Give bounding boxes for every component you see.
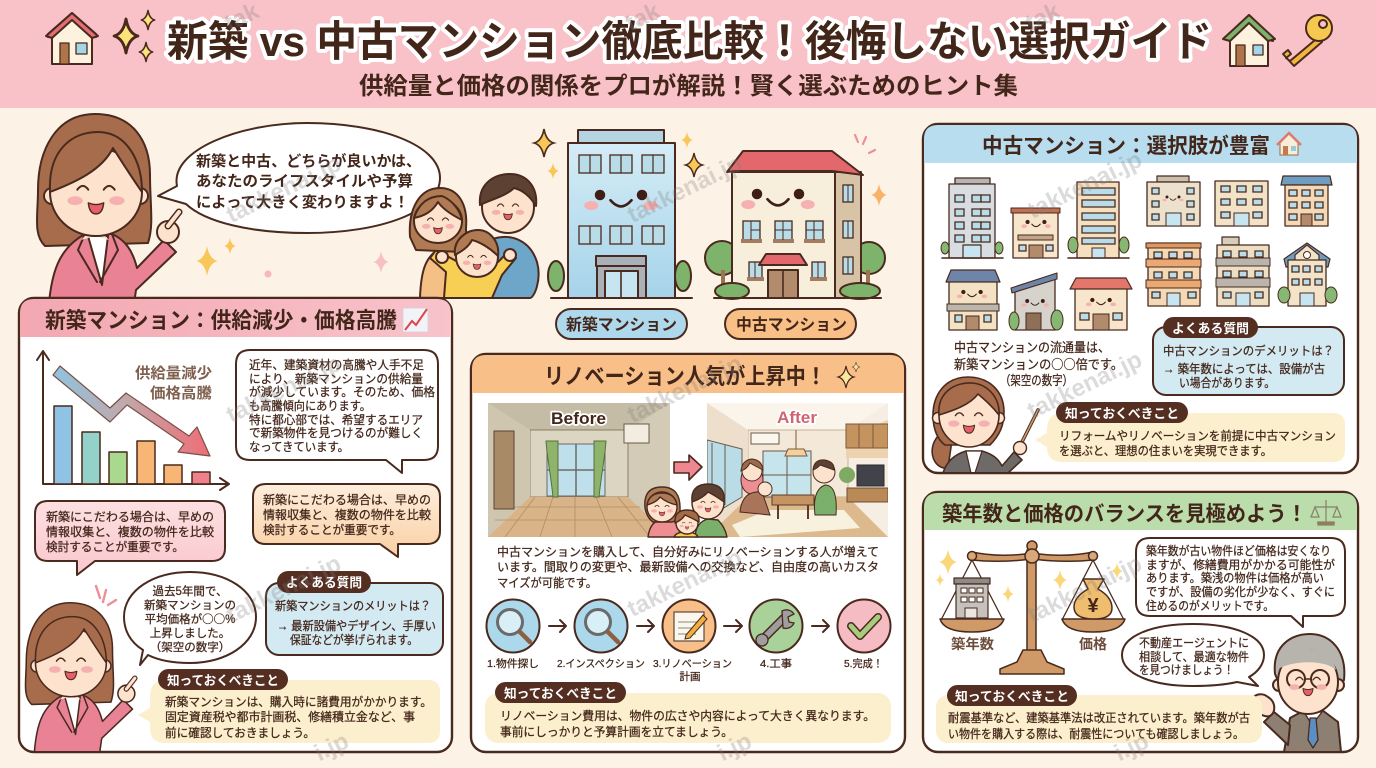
note: things to know, used condos: を選ぶと、理想の住まいを実現できます。 xyxy=(1059,443,1272,458)
speech bubble: price rise: 上昇しました。 xyxy=(150,627,230,640)
note: things to know, new condos xyxy=(138,669,440,743)
illustration: room before: Before xyxy=(551,409,606,428)
illustration: grey striped block xyxy=(1216,237,1270,306)
arrow xyxy=(812,620,829,632)
step labels: 5.完成！ xyxy=(844,658,883,670)
icon: step 1 search xyxy=(486,600,540,652)
note: things to know, new condos: 固定資産税や都市計画税、修繕積立金など、事 xyxy=(165,709,415,724)
bubble: age trade-off: ですが、設備の劣化が少なく、すぐに xyxy=(1146,584,1335,599)
FAQ box: demerits: → 築年数によっては、設備が古 xyxy=(1163,361,1325,376)
FAQ box: merits xyxy=(266,571,443,655)
illustration: room before xyxy=(488,403,670,537)
speech bubble: price rise: 過去5年間で、 xyxy=(153,584,227,598)
illustration: small face building xyxy=(1011,208,1060,258)
text: renovation description: 中古マンションを購入して、自分好みにリノベーションする人が増えて xyxy=(497,544,879,559)
icon: step 3 plan xyxy=(662,600,716,652)
illustration: beige block xyxy=(1215,181,1268,226)
watermarks: takkenai.jp xyxy=(623,544,746,623)
bubble: age trade-off: 築年数が古い物件ほど価格は安くなり xyxy=(1146,543,1331,558)
FAQ box: demerits: よくある質問 xyxy=(1172,321,1249,336)
speech bubble: intro: あなたのライフスタイルや予算 xyxy=(196,172,413,190)
bar chart: supply decline: 供給量減少 xyxy=(135,365,212,382)
bubble: age trade-off: 住めるのがメリットです。 xyxy=(1146,598,1274,613)
text: stock comparison: 新築マンションの○○倍です。 xyxy=(954,354,1123,373)
bubble: age trade-off: ますが、修繕費用がかかる可能性が xyxy=(1146,557,1335,572)
FAQ box: demerits: 中古マンションのデメリットは？ xyxy=(1163,343,1334,358)
note: things to know, balance: い物件を購入する際は、耐震性についても確認しましょう。 xyxy=(948,726,1244,741)
note: things to know, renovation: リノベーション費用は、物件の広さや内容によって大きく異なります。 xyxy=(500,708,875,723)
bubble: market explanation: も高騰傾向にあります。 xyxy=(249,398,371,413)
note: things to know, balance: 知っておくべきこと xyxy=(955,689,1069,704)
speech bubble: agent advice: 相談して、最適な物件 xyxy=(1139,650,1249,664)
icon: step 5 complete xyxy=(838,600,890,652)
arrow: before to after xyxy=(674,455,702,480)
bubble: orange advice: 情報収集と、複数の物件を比較 xyxy=(263,507,431,522)
step labels: 1.物件探し xyxy=(487,657,539,670)
icon: sparkles xyxy=(114,10,155,62)
subtitle: 供給量と価格の関係をプロが解説！賢く選ぶためのヒント集 xyxy=(359,72,1018,100)
illustration: used condo building xyxy=(705,135,887,299)
bar chart: supply decline xyxy=(37,351,229,490)
illustration: red roof house xyxy=(1070,278,1132,330)
note: things to know, balance xyxy=(936,685,1262,743)
watermarks: i.jp xyxy=(713,728,756,767)
illustration: room after xyxy=(707,403,888,537)
note: things to know, renovation: 事前にしっかりと予算計画を立てましょう。 xyxy=(500,724,733,739)
label: used condo xyxy=(725,309,856,339)
illustration: slanted roof house xyxy=(1009,273,1063,330)
panel heading: renovation: リノベーション人気が上昇中！ xyxy=(544,364,826,389)
FAQ box: merits: 新築マンションのメリットは？ xyxy=(275,598,431,613)
title: 新築 vs 中古マンション徹底比較！後悔しない選択ガイド xyxy=(167,18,1212,65)
icon: key xyxy=(1283,15,1332,66)
illustration: blue roof house with face xyxy=(946,270,1000,330)
illustration: orange striped block xyxy=(1146,243,1201,306)
icon: rising chart xyxy=(403,308,428,332)
note: things to know, renovation xyxy=(485,682,891,743)
speech bubble: agent advice: 不動産エージェントに xyxy=(1139,636,1249,650)
speech bubble: agent advice: を見つけましょう！ xyxy=(1139,663,1234,677)
panel: used condos xyxy=(923,124,1358,473)
text: renovation description: マイズが可能です。 xyxy=(497,575,597,590)
bubble: pink advice xyxy=(35,501,225,575)
note: things to know, used condos: 知っておくべきこと xyxy=(1065,406,1179,421)
elderly agent man xyxy=(1252,634,1344,752)
bubble: market explanation: 近年、建築資材の高騰や人手不足 xyxy=(249,357,424,372)
watermarks xyxy=(220,0,1153,767)
bubble: age trade-off: あります。築浅の物件は価格が高い xyxy=(1146,570,1324,585)
icon: house xyxy=(1277,133,1301,155)
step labels: 2.インスペクション xyxy=(557,658,645,670)
note: things to know, new condos: 新築マンションは、購入時に諸費用がかかります。 xyxy=(165,694,432,709)
sparkles near presenter xyxy=(196,238,389,278)
FAQ box: merits: → 最新設備やデザイン、手厚い xyxy=(277,618,436,633)
speech bubble: price rise: 平均価格が○○% xyxy=(145,611,235,627)
speech bubble: price rise: （架空の数字） xyxy=(150,641,230,654)
icon: grey building xyxy=(954,578,990,618)
bubble: age trade-off xyxy=(1136,538,1345,627)
illustration: beige block with face xyxy=(1147,176,1200,226)
bubble: orange advice: 新築にこだわる場合は、早めの xyxy=(263,492,431,507)
consultant woman with pointer xyxy=(932,377,1038,473)
watermarks: i.jp xyxy=(1110,728,1153,767)
icon: green roof house xyxy=(1223,15,1275,66)
watermarks: takkenai.jp xyxy=(1023,146,1146,225)
illustration: blue roof block xyxy=(1281,176,1332,226)
watermarks: takkenai.jp xyxy=(222,550,345,629)
illustration: balance scale xyxy=(936,541,1125,674)
speech bubble: price rise xyxy=(124,572,256,665)
bubble: market explanation: が減少しています。そのため、価格 xyxy=(249,384,435,399)
step labels: 計画 xyxy=(680,671,700,683)
bubble: market explanation: 特に都心部では、希望するエリア xyxy=(249,412,423,427)
bubble: pink advice: 情報収集と、複数の物件を比較 xyxy=(46,524,214,539)
speech bubble: agent advice xyxy=(1122,624,1264,686)
note: things to know, used condos xyxy=(1035,402,1345,462)
text: renovation description xyxy=(497,544,879,590)
icon: small scales xyxy=(1311,500,1341,525)
speech bubble: price rise: 新築マンションの xyxy=(144,598,236,612)
bubble: orange advice: 検討することが重要です。 xyxy=(263,522,401,537)
arrow xyxy=(637,620,654,632)
note: things to know, renovation: 知っておくべきこと xyxy=(504,686,617,701)
watermarks: takkenai.jp xyxy=(623,150,746,229)
bubble: pink advice: 新築にこだわる場合は、早めの xyxy=(46,509,214,524)
bubble: market explanation: なってきています。 xyxy=(249,440,349,454)
icon: sparkle xyxy=(838,362,860,388)
watermarks: takkenai.jp xyxy=(222,150,345,229)
label: new condo xyxy=(556,309,687,339)
bubble: pink advice: 検討することが重要です。 xyxy=(46,539,184,554)
family in front of rooms xyxy=(645,484,727,537)
note: things to know, new condos: 前に確認しておきましょう。 xyxy=(165,725,315,740)
panel: age and price balance xyxy=(923,492,1358,752)
note: things to know, balance: 耐震基準など、建築基準法は改正されています。築年数が古 xyxy=(948,710,1250,725)
step labels xyxy=(487,657,883,683)
panel: new condos xyxy=(19,298,452,760)
speech bubble: intro xyxy=(158,123,440,233)
illustration: clock tower building xyxy=(1278,243,1337,306)
consultant woman xyxy=(25,586,135,760)
note: things to know, used condos: リフォームやリノベーションを前提に中古マンション xyxy=(1059,428,1336,443)
icon: step 4 wrench xyxy=(750,600,802,652)
text: stock comparison: 中古マンションの流通量は、 xyxy=(954,340,1110,355)
text: stock comparison xyxy=(954,340,1123,388)
arrow xyxy=(549,620,566,632)
bubble: market explanation: で新築物件を見つけるのが難しく xyxy=(249,425,423,440)
bubble: orange advice xyxy=(253,484,440,557)
step flow xyxy=(486,600,890,683)
watermarks: takkenai.jp xyxy=(222,350,345,429)
arrow xyxy=(724,620,742,632)
illustration: banded tower xyxy=(1068,182,1129,258)
header band xyxy=(0,0,1376,108)
step labels: 3.リノベーション xyxy=(653,658,732,670)
speech bubble: intro: 新築と中古、どちらが良いかは、 xyxy=(196,152,421,170)
icon: step 2 inspection xyxy=(574,600,628,652)
presenter woman xyxy=(37,114,179,318)
step labels: 4.工事 xyxy=(760,657,793,670)
illustration: balance scale: 築年数 xyxy=(951,636,994,652)
label: new condo: 新築マンション xyxy=(566,315,677,334)
FAQ box: demerits: い場合があります。 xyxy=(1179,375,1275,390)
family illustration xyxy=(410,174,539,298)
text: renovation description: います。間取りの変更や、最新設備への交換など、自由度の高いカスタ xyxy=(497,559,879,574)
illustration: new condo building xyxy=(534,129,702,298)
FAQ box: merits: 保証などが挙げられます。 xyxy=(290,632,418,647)
icon: money bag: ¥ xyxy=(1087,595,1099,617)
text: stock comparison: （架空の数字） xyxy=(1000,373,1073,388)
illustration: room after: After xyxy=(777,408,817,427)
panel heading: new condos: 新築マンション：供給減少・価格高騰 xyxy=(45,308,397,333)
bar chart: supply decline: 価格高騰 xyxy=(150,384,212,402)
panel heading: balance: 築年数と価格のバランスを見極めよう！ xyxy=(942,503,1307,526)
illustration: grey tower xyxy=(941,178,1003,258)
watermarks: takkenai.jp xyxy=(1023,550,1146,629)
FAQ box: merits: よくある質問 xyxy=(286,575,362,590)
FAQ box: demerits xyxy=(1153,317,1344,395)
note: things to know, new condos: 知っておくべきこと xyxy=(167,673,279,688)
illustration: balance scale: 価格 xyxy=(1079,636,1107,652)
icon: money bag xyxy=(1074,579,1112,619)
watermarks: takkenai.jp xyxy=(623,350,746,429)
icon: red roof house xyxy=(46,13,98,64)
panel heading: used condos: 中古マンション：選択肢が豊富 xyxy=(982,134,1270,158)
panel: renovation xyxy=(471,354,905,752)
label: used condo: 中古マンション xyxy=(736,316,847,334)
bubble: market explanation xyxy=(236,350,438,473)
bubble: market explanation: により、新築マンションの供給量 xyxy=(249,371,423,386)
watermarks: i.jp xyxy=(310,728,353,767)
watermarks: takkenai.jp xyxy=(1023,346,1146,425)
speech bubble: intro: によって大きく変わりますよ！ xyxy=(196,193,409,211)
